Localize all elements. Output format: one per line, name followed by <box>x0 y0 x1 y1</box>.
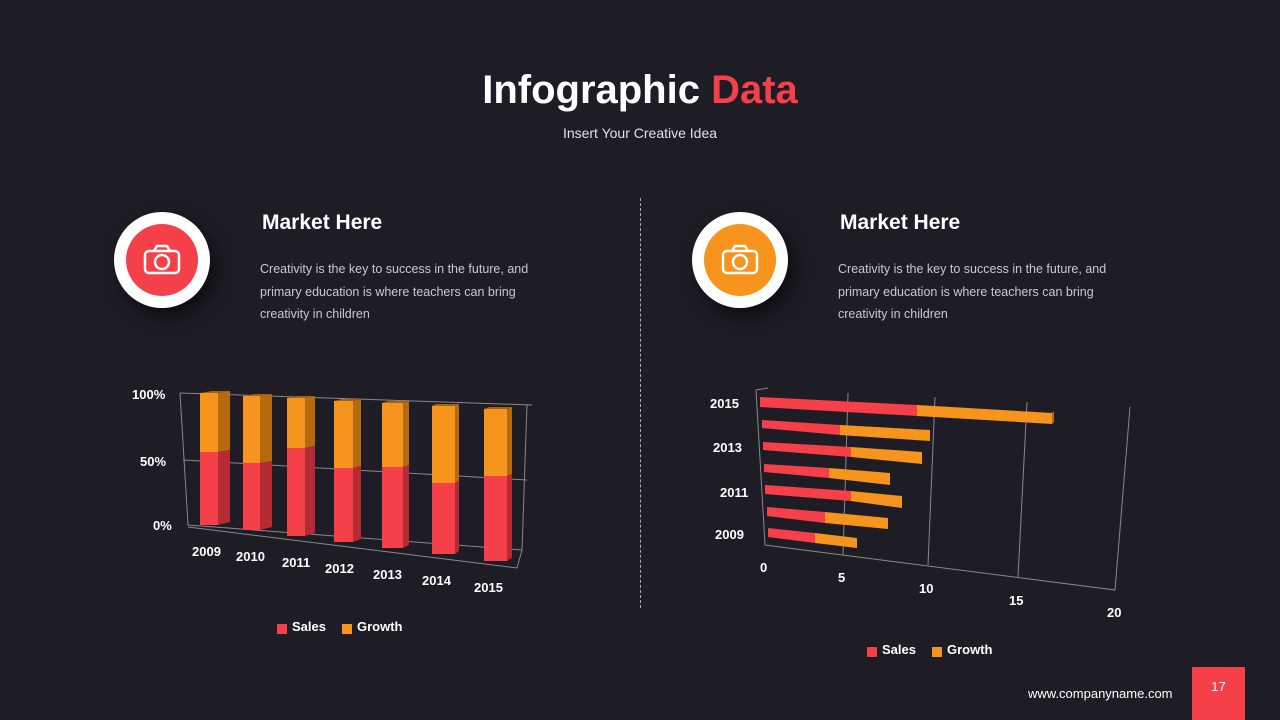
bar chart: left stacked: 2012 <box>325 561 354 576</box>
bar chart: right horizontal: 0 <box>760 560 767 575</box>
text: Creativity is the key to success in the future, and primary education is where teachers can bring creativity in children <box>260 262 528 321</box>
heading: Market Here <box>262 211 382 234</box>
bar chart: right horizontal: 20 <box>1107 605 1121 620</box>
bar chart: left stacked: 0% <box>153 518 172 533</box>
page number <box>1192 667 1245 720</box>
bar chart: left stacked: 2009 <box>192 544 221 559</box>
legend: right: Growth <box>947 642 993 657</box>
footer url: www.companyname.com <box>1028 686 1172 701</box>
panel: left <box>114 211 528 321</box>
legend: left: Growth <box>357 619 403 634</box>
bar chart: right horizontal <box>710 388 1130 620</box>
heading: Market Here <box>840 211 960 234</box>
bar chart: left stacked <box>132 387 532 595</box>
legend: left: Sales <box>292 619 326 634</box>
bar chart: left stacked: 50% <box>140 454 166 469</box>
bar chart: right horizontal: 2013 <box>713 440 742 455</box>
bar chart: right horizontal: 2011 <box>720 485 748 500</box>
panel: right <box>692 211 1106 321</box>
divider <box>640 198 641 608</box>
title: Infographic Data <box>482 68 798 112</box>
bar chart: left stacked: 2013 <box>373 567 402 582</box>
subtitle: Insert Your Creative Idea <box>563 125 717 141</box>
bar chart: left stacked: 2014 <box>422 573 452 588</box>
bar chart: right horizontal: 15 <box>1009 593 1023 608</box>
bar chart: left stacked: 2011 <box>282 555 310 570</box>
icon: camera red <box>114 212 210 308</box>
text: Creativity is the key to success in the future, and primary education is where teachers can bring creativity in children <box>838 262 1106 321</box>
bar chart: right horizontal: 5 <box>838 570 845 585</box>
bar chart: left stacked: 2015 <box>474 580 503 595</box>
bar chart: left stacked: 2010 <box>236 549 265 564</box>
bar chart: right horizontal: 10 <box>919 581 933 596</box>
icon: camera orange <box>692 212 788 308</box>
bar chart: right horizontal: 2015 <box>710 396 739 411</box>
legend: right <box>867 642 993 657</box>
page number: 17 <box>1211 679 1226 694</box>
legend: right: Sales <box>882 642 916 657</box>
bar chart: right horizontal: 2009 <box>715 527 744 542</box>
bar chart: left stacked: 100% <box>132 387 166 402</box>
legend: left <box>277 619 403 634</box>
